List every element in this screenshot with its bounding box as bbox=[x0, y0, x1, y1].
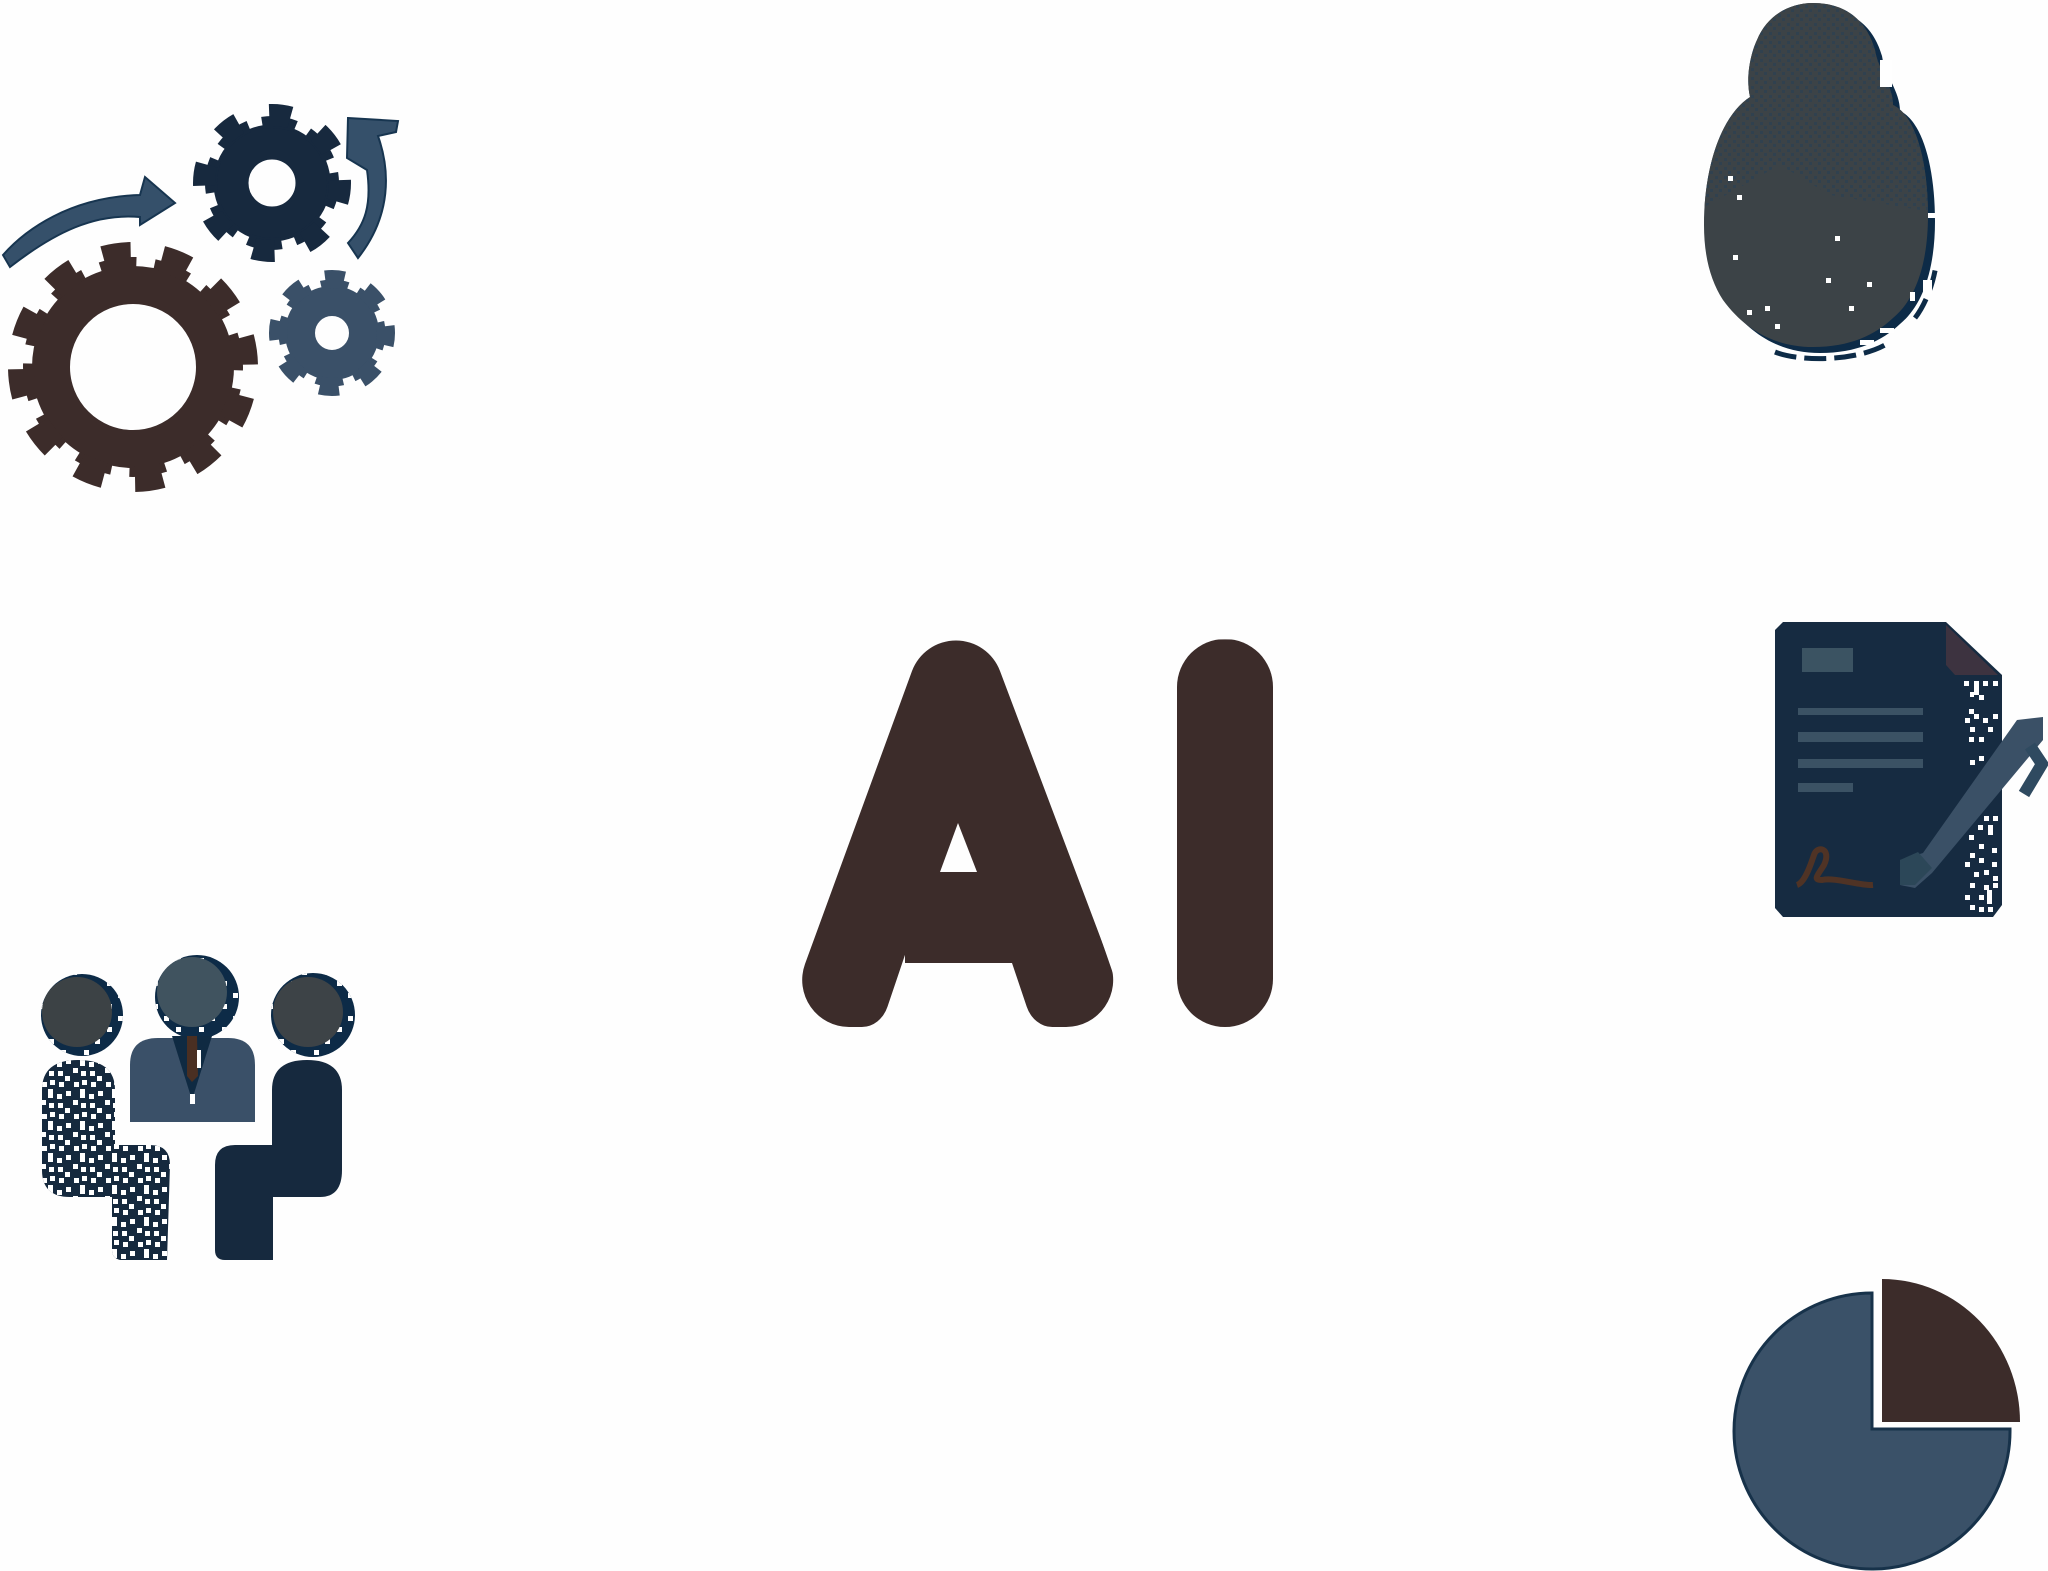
icon: contract document and pen bbox=[1775, 622, 2043, 917]
brown quarter slice bbox=[1882, 1279, 2020, 1422]
letter A bbox=[802, 640, 1114, 1027]
dark navy gear bbox=[202, 113, 342, 253]
white speckles bbox=[1728, 60, 1937, 345]
counter of the A bbox=[940, 823, 977, 872]
document page bbox=[1775, 622, 2002, 917]
icon: three people meeting bbox=[41, 955, 355, 1260]
letter A: A bbox=[822, 569, 1094, 1095]
icon: gears with arrows bbox=[0, 113, 398, 504]
center person with tie bbox=[130, 955, 255, 1122]
crossbar fill bbox=[905, 795, 1015, 963]
letter I: I bbox=[1158, 561, 1292, 1103]
silhouette fill bbox=[1704, 3, 1928, 347]
large blue pie slice bbox=[1734, 1293, 2010, 1569]
central AI title bbox=[802, 639, 1273, 1027]
document text lines bbox=[1798, 708, 1923, 792]
left seated person bbox=[41, 974, 170, 1260]
large brown gear bbox=[0, 230, 270, 504]
blue gear bbox=[272, 273, 392, 393]
lower broken fringe bbox=[1775, 265, 1936, 359]
dithered upper shading bbox=[1704, 3, 1928, 210]
signature bbox=[1797, 849, 1873, 885]
curved arrow towards dark gear bbox=[3, 177, 175, 267]
right seated person bbox=[215, 973, 355, 1260]
speckles on page edge bbox=[1964, 681, 1998, 912]
icon: person silhouette bust bbox=[1704, 3, 1937, 359]
folded corner bbox=[1946, 625, 1998, 675]
icon: pie chart bbox=[1734, 1279, 2020, 1569]
pen bbox=[1900, 717, 2043, 888]
silhouette shadow fringe bbox=[1711, 9, 1935, 353]
document header block bbox=[1802, 648, 1853, 672]
curved arrow upward bbox=[347, 118, 398, 258]
